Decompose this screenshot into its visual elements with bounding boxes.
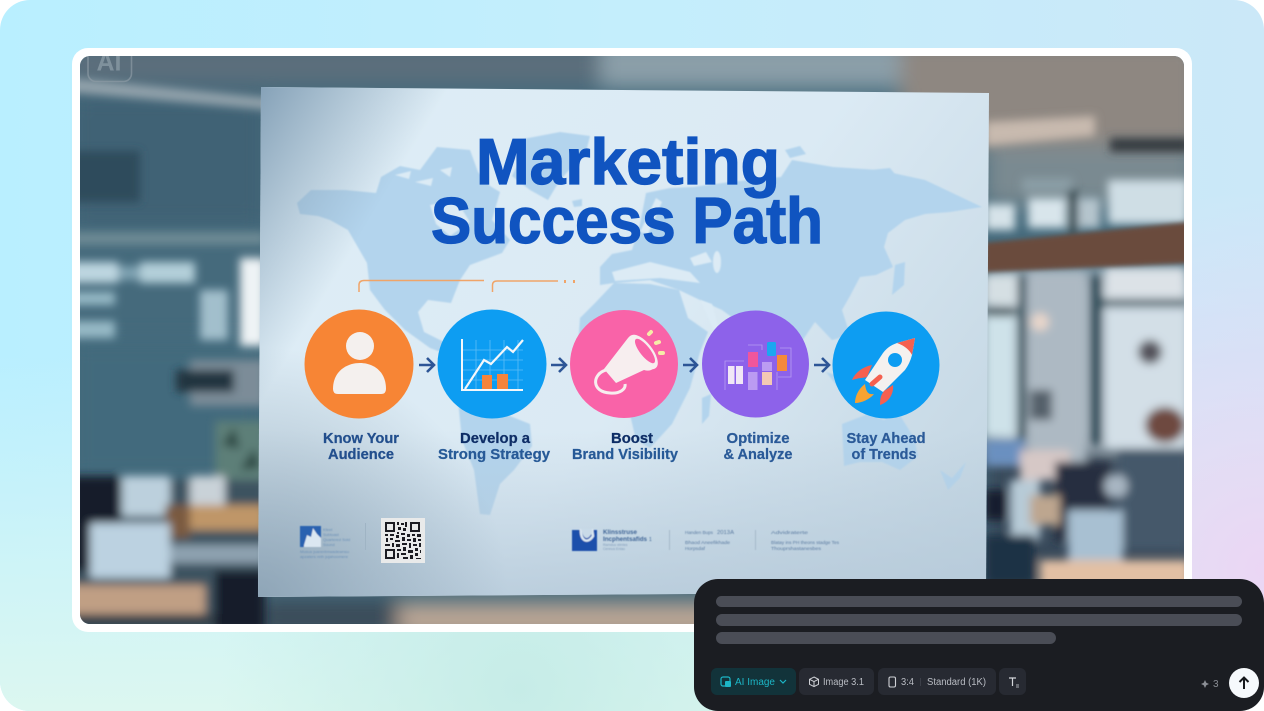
orange bracket lines [359,280,574,292]
label: optimize and analyze: & Analyze [724,446,792,463]
step 4: optimize and analyze [702,310,809,463]
text: centre footer name: Cennus Enlao [603,547,625,551]
label: know your audience: Know Your [323,430,399,447]
credits: 3 [1213,679,1219,690]
text: left footer: Sound [323,542,335,547]
text: left footer: Kfeet [323,527,333,532]
footer details column one: Horpsdaf [685,546,706,551]
panel: prompt box [694,579,1264,711]
text: centre footer name: Incphentsafids [603,537,648,543]
world map [258,87,989,597]
button: text style [999,668,1026,695]
footer details column two [755,530,840,551]
label: know your audience: Audience [328,446,394,463]
footer details column one: Handen Bups [685,530,714,535]
title [432,136,820,244]
white image frame [72,48,1192,632]
arrow 4 [814,358,829,372]
poster sheet [258,87,989,597]
label: optimize and analyze: Optimize [726,430,790,447]
label: develop a strong strategy: Develop a [460,430,531,447]
skeleton text bars [716,596,1242,644]
button: image 3.1: Image 3.1 [823,677,864,688]
button: aspect ratio and quality: 3:4 [901,677,914,688]
button: ai image [711,668,796,695]
divider [365,523,366,550]
step 5: stay ahead of trends [832,312,940,463]
arrow 1 [419,358,434,372]
label: optimize and analyze [724,430,792,463]
label: boost brand visibility [572,432,678,462]
text: centre footer name: Klinsstruse [603,530,638,536]
label: stay ahead of trends [846,432,925,460]
footer centre organisation block [572,529,652,551]
poster shading [258,87,989,597]
footer details column one: Bhaod Aneefikhade [685,540,731,545]
text: centre footer name: Ramduu elmtes [603,543,628,547]
text: left footer [300,527,350,559]
label: stay ahead of trends: Stay Ahead [846,430,926,447]
label: develop a strong strategy: Strong Strategy [438,446,551,463]
label: boost brand visibility: Boost [611,430,653,447]
logo: left footer [300,526,321,547]
icon: dashboard [702,310,809,418]
AI watermark [87,56,132,82]
text: left footer: Subtoast [323,532,340,537]
seas and lakes [396,167,722,306]
right side details [985,116,1095,146]
icon: person [304,310,414,418]
footer details column two: Thouprshastanesbes [771,546,822,551]
button: aspect ratio and quality: Standard (1K) [927,677,986,688]
text: centre footer name: 1 [649,537,652,543]
icon: growth chart [438,310,546,418]
icon: rocket [832,312,940,418]
panel: poster [258,87,989,597]
footer details column two: Blatay ins PH theons stadge Tes [771,540,840,545]
icon: qr code [381,518,425,563]
footer details column one [669,530,734,551]
footer left organisation block [300,526,350,559]
button: aspect ratio and quality [878,668,996,695]
logo: centre footer [572,529,597,551]
arrow 2 [551,358,566,372]
text: left footer: Quartered Sold [323,537,350,542]
brown ceiling beam [985,222,1190,272]
text: left footer: Musus juarentmwadewnsu [300,549,349,554]
label: develop a strong strategy [438,430,551,463]
panel: office photo [70,40,1200,637]
AI watermark: AI [96,48,122,76]
title: Success Path [431,184,823,257]
icon: megaphone [570,310,678,418]
button: image 3.1 [799,668,874,695]
step 1: know your audience [304,310,414,463]
title: Marketing [476,125,780,198]
footer details column one: 2013A [717,530,734,536]
label: know your audience [324,432,399,460]
label: boost brand visibility: Brand Visibility [572,446,679,463]
footer details column two: Advidraterte [771,530,809,535]
credits [1201,679,1219,690]
left side details [70,78,270,110]
step 3: boost brand visibility [570,310,679,463]
button: send [1229,668,1259,698]
arrow 3 [683,358,697,372]
text: left footer: apzaters reth jujahoomere [300,554,349,559]
text: centre footer name [603,530,652,551]
button: ai image: AI Image [735,677,775,688]
step 2: develop a strong strategy [438,310,551,463]
label: stay ahead of trends: of Trends [852,446,916,463]
